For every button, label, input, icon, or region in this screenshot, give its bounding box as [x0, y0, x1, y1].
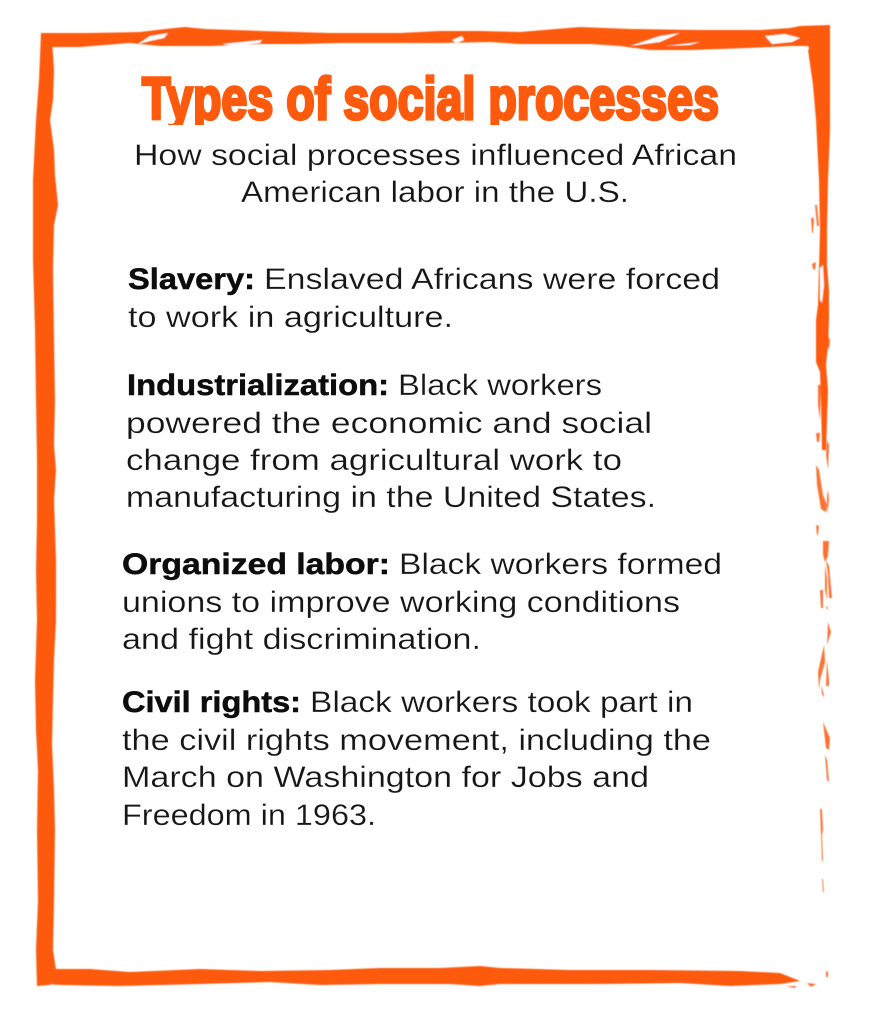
frame right edge, solid section: [808, 25, 830, 450]
text block: industrialization: [126, 369, 656, 514]
text block: industrialization: Black workers: [398, 369, 602, 402]
text block: civil rights: Black workers took part in: [310, 686, 693, 719]
text block: slavery: to work in agriculture.: [128, 301, 453, 334]
text block: civil rights: March on Washington for Jobs and: [122, 761, 649, 794]
subtitle: How social processes influenced African: [134, 139, 737, 172]
text block: industrialization: Industrialization:: [127, 369, 389, 402]
text block: organized labor: and fight discrimination.: [122, 623, 481, 656]
text block: civil rights: [122, 686, 711, 832]
frame bottom edge: [37, 966, 800, 986]
text block: civil rights: Civil rights:: [122, 686, 301, 719]
text block: slavery: [128, 263, 720, 334]
text block: industrialization: change from agricultural work to: [126, 444, 622, 477]
text block: organized labor: Organized labor:: [122, 548, 390, 581]
frame left edge: [33, 33, 58, 986]
subtitle: American labor in the U.S.: [241, 176, 629, 209]
text block: civil rights: Freedom in 1963.: [122, 799, 376, 832]
frame right edge, white split in stroke: [820, 265, 824, 303]
text block: industrialization: powered the economic and social: [126, 407, 652, 440]
text block: slavery: Slavery:: [128, 263, 255, 296]
frame right edge, broken fragments: [786, 205, 832, 988]
text block: civil rights: the civil rights movement, including the: [122, 724, 711, 757]
text block: organized labor: Black workers formed: [399, 548, 722, 581]
text block: industrialization: manufacturing in the United States.: [126, 481, 656, 514]
title: Types of social processes: [142, 66, 719, 132]
frame top edge: [41, 25, 830, 50]
text block: slavery: Enslaved Africans were forced: [264, 263, 720, 296]
text block: organized labor: unions to improve working conditions: [122, 586, 680, 619]
subtitle: [134, 139, 737, 209]
text block: organized labor: [122, 548, 722, 656]
